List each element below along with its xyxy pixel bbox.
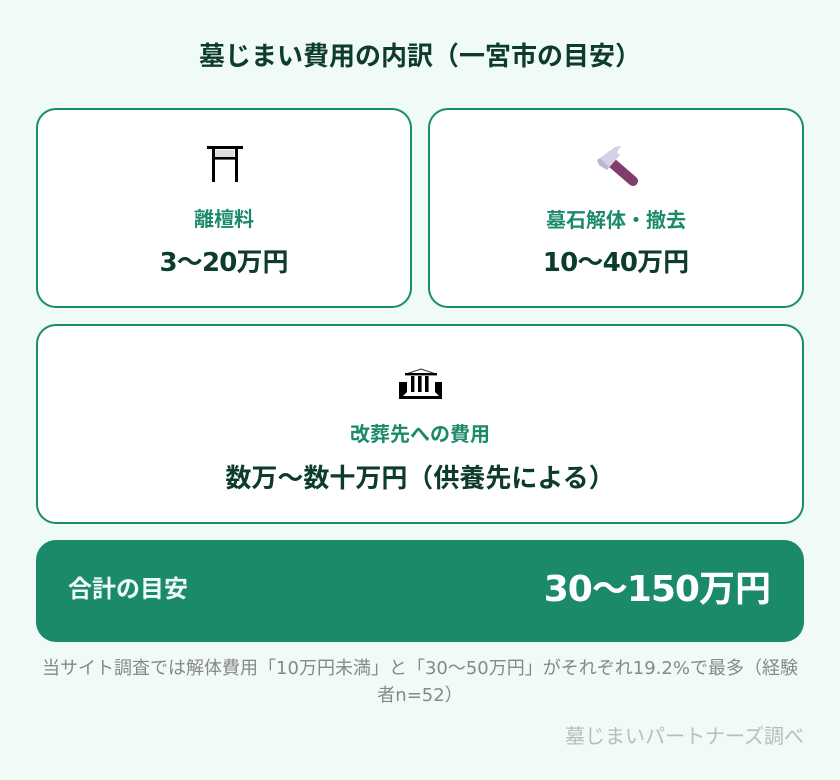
panel: 離檀料	[36, 108, 412, 308]
source: 墓じまいパートナーズ調べ	[565, 724, 804, 748]
panel: total	[36, 540, 804, 642]
value: 3〜20万円: 3〜20万円	[159, 248, 289, 278]
total value: 30〜150万円	[544, 569, 771, 610]
value: 10〜40万円: 10〜40万円	[543, 248, 689, 278]
icon: torii	[207, 146, 243, 182]
title: 墓じまい費用の内訳（一宮市の目安）	[199, 42, 641, 72]
label: 改葬先への費用: 改葬先への費用	[350, 422, 490, 446]
total label: 合計の目安	[68, 575, 188, 603]
value: 数万〜数十万円: 数万〜数十万円（供養先による）	[225, 464, 615, 494]
label: 墓石解体・撤去: 墓石解体・撤去	[546, 204, 686, 233]
panel: 改葬先への費用	[36, 324, 804, 524]
icon: hammer	[597, 146, 638, 186]
panel: 墓石解体・撤去	[428, 108, 804, 308]
icon: classical building	[399, 368, 442, 399]
label: 離檀料: 離檀料	[194, 207, 254, 231]
note text: 当サイト調査では解体費用「10万円未満」と「30〜50万円」がそれぞれ19.2%で最多（経験者n=52）	[42, 658, 798, 706]
